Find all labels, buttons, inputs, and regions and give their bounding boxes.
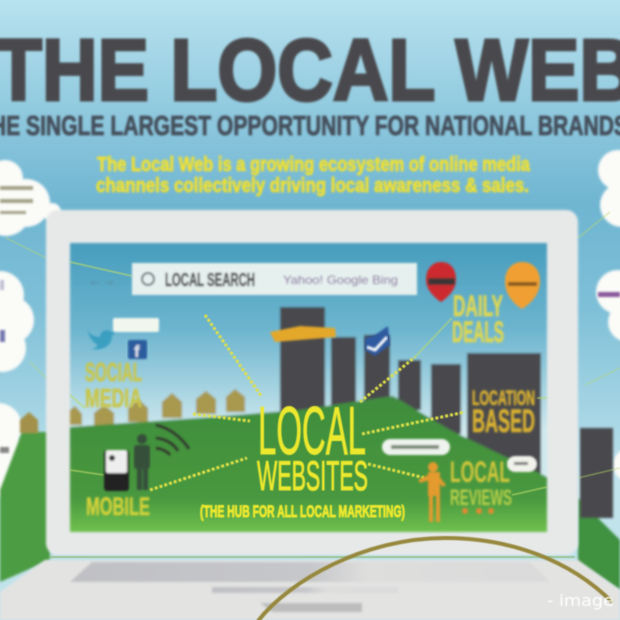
skyline (280, 307, 541, 483)
thin lines on screen (70, 262, 547, 495)
person: mobile user (134, 434, 150, 490)
location based (472, 387, 535, 439)
local websites (200, 393, 405, 521)
small speech bubble (507, 456, 537, 472)
keyboard shadow 1 (70, 562, 550, 582)
stars (462, 508, 494, 514)
search label: LOCAL SEARCH (165, 270, 255, 290)
twitter icon (87, 330, 116, 349)
hub caption: (THE HUB FOR ALL LOCAL MARKETING) (200, 502, 405, 521)
balloon: orange (505, 262, 540, 309)
mobile label: MOBILE (86, 493, 150, 521)
person: reviewer (418, 462, 446, 522)
laptop base (0, 560, 620, 620)
wifi signal (156, 425, 189, 455)
house left outside (20, 412, 38, 433)
cloud: top right (598, 150, 620, 227)
keyboard shadow 2 (212, 587, 398, 593)
local reviews (450, 456, 512, 514)
flag (365, 326, 390, 356)
intro text: channels collectively driving local awareness & sales. (96, 175, 529, 197)
phone icon (104, 450, 129, 491)
daily deals: DEALS (452, 316, 504, 349)
local websites: LOCAL (258, 393, 366, 469)
local reviews: REVIEWS (450, 485, 512, 510)
cloud text (0, 186, 620, 453)
facebook icon (128, 340, 147, 361)
twitter label (113, 318, 159, 332)
image caption: - image (547, 591, 614, 610)
ground hills outside laptop (0, 412, 620, 590)
building outside right (580, 428, 613, 518)
green strip under bezel (50, 556, 575, 558)
search bar (88, 263, 417, 295)
balloon: red (426, 262, 456, 302)
intro text: The Local Web is a growing ecosystem of online media (97, 154, 531, 176)
social media: SOCIAL (85, 357, 142, 387)
social media (85, 357, 142, 413)
hill (70, 396, 547, 532)
location based: LOCATION (472, 387, 535, 410)
clouds (0, 150, 620, 498)
cloud: lower left (0, 403, 23, 498)
daily deals: DAILY (453, 290, 503, 323)
screen (70, 243, 547, 532)
dotted connector lines (150, 315, 465, 490)
cloud: top left (0, 160, 61, 236)
keyboard shadow 3 (260, 603, 362, 612)
facebook icon: f (134, 342, 140, 361)
local websites: WEBSITES (257, 452, 368, 499)
thin lines outside laptop (6, 212, 620, 478)
social media: MEDIA (85, 383, 142, 413)
olive arc (258, 538, 612, 620)
speech bubble (382, 439, 450, 455)
daily deals (452, 290, 504, 349)
laptop bezel (46, 210, 578, 555)
intro text (96, 154, 531, 197)
search engines: Yahoo! Google Bing (283, 273, 398, 287)
cloud: middle right (596, 270, 620, 342)
browser arrows: ←→ (88, 272, 116, 288)
houses (70, 389, 245, 428)
local reviews: LOCAL (450, 456, 510, 489)
cloud: lower right (613, 448, 620, 482)
cloud: middle left (0, 271, 34, 372)
location based: BASED (472, 403, 535, 439)
yelp-style ribbon (270, 326, 336, 342)
